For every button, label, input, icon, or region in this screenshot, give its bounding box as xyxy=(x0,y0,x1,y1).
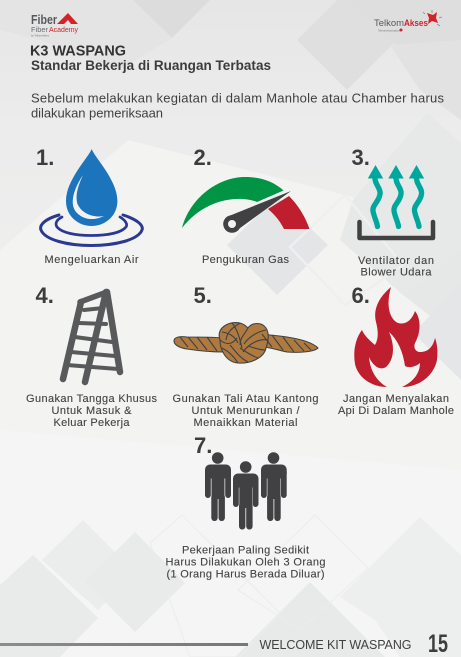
label: Gunakan Tangga Khusus xyxy=(26,393,158,405)
icon: ventilation tray with arrows xyxy=(360,165,433,238)
item 5: rope xyxy=(172,283,318,429)
item 3: ventilator: 3. xyxy=(352,145,370,170)
item 6: no fire xyxy=(338,283,454,417)
item 2: gas measurement: 2. xyxy=(194,145,212,170)
label: Blower Udara xyxy=(360,266,432,278)
title: K3 WASPANG xyxy=(30,44,126,60)
label xyxy=(26,393,158,429)
label: Untuk Menurunkan / xyxy=(192,405,300,417)
logo: TelkomAkses xyxy=(374,10,442,32)
label xyxy=(338,393,454,417)
intro paragraph: Sebelum melakukan kegiatan di dalam Manhole atau Chamber harus xyxy=(31,90,444,106)
logo: Fiber Academy: Fiber xyxy=(31,27,49,34)
item 4: ladder: 4. xyxy=(36,283,54,308)
item 5: rope: 5. xyxy=(194,283,212,308)
logo: TelkomAkses: Akses xyxy=(404,18,428,28)
item 1: remove water: 1. xyxy=(36,145,54,170)
logo: Fiber Academy: Fiber xyxy=(31,13,57,27)
label: Untuk Masuk & xyxy=(52,405,132,417)
label: Ventilator dan xyxy=(358,255,434,267)
label: Jangan Menyalakan xyxy=(343,393,449,405)
label xyxy=(166,544,326,580)
icon: rope knot xyxy=(174,323,318,363)
icon: water drop with ripples xyxy=(41,149,142,246)
label: Harus Dilakukan Oleh 3 Orang xyxy=(166,556,326,568)
label: Pekerjaan Paling Sedikit xyxy=(182,544,309,556)
intro paragraph xyxy=(31,90,444,120)
label xyxy=(172,393,318,429)
logo: TelkomAkses: Telkom xyxy=(374,18,404,28)
item 2: gas measurement xyxy=(182,145,310,266)
icon: flame xyxy=(354,287,437,387)
logo: Fiber Academy xyxy=(31,13,78,38)
logo: TelkomAkses: Telecommunications xyxy=(378,30,401,32)
label: Mengeluarkan Air xyxy=(44,254,139,266)
footer text: WELCOME KIT WASPANG xyxy=(260,638,412,652)
label: Keluar Pekerja xyxy=(54,417,130,429)
label: Gunakan Tali Atau Kantong xyxy=(172,393,318,405)
logo: Fiber Academy: by TelkomAkses xyxy=(31,34,50,38)
item 3: ventilator xyxy=(352,145,434,278)
item 1: remove water xyxy=(36,145,142,266)
item 7: three workers xyxy=(166,433,326,580)
subtitle: Standar Bekerja di Ruangan Terbatas xyxy=(31,58,271,73)
logo: Fiber Academy: Academy xyxy=(49,27,78,34)
item 4: ladder xyxy=(26,283,158,429)
label: Pengukuran Gas xyxy=(202,254,290,266)
label: Menaikkan Material xyxy=(194,417,298,429)
footer bar xyxy=(0,643,248,646)
item 6: no fire: 6. xyxy=(352,283,370,308)
label xyxy=(358,255,434,278)
label: Api Di Dalam Manhole xyxy=(338,405,454,417)
label: (1 Orang Harus Berada Diluar) xyxy=(166,568,324,580)
icon: three people xyxy=(205,452,287,530)
intro paragraph: dilakukan pemeriksaan xyxy=(31,106,163,120)
icon: ladder xyxy=(63,292,120,382)
icon: gauge xyxy=(182,177,310,233)
item 7: three workers: 7. xyxy=(194,433,212,458)
